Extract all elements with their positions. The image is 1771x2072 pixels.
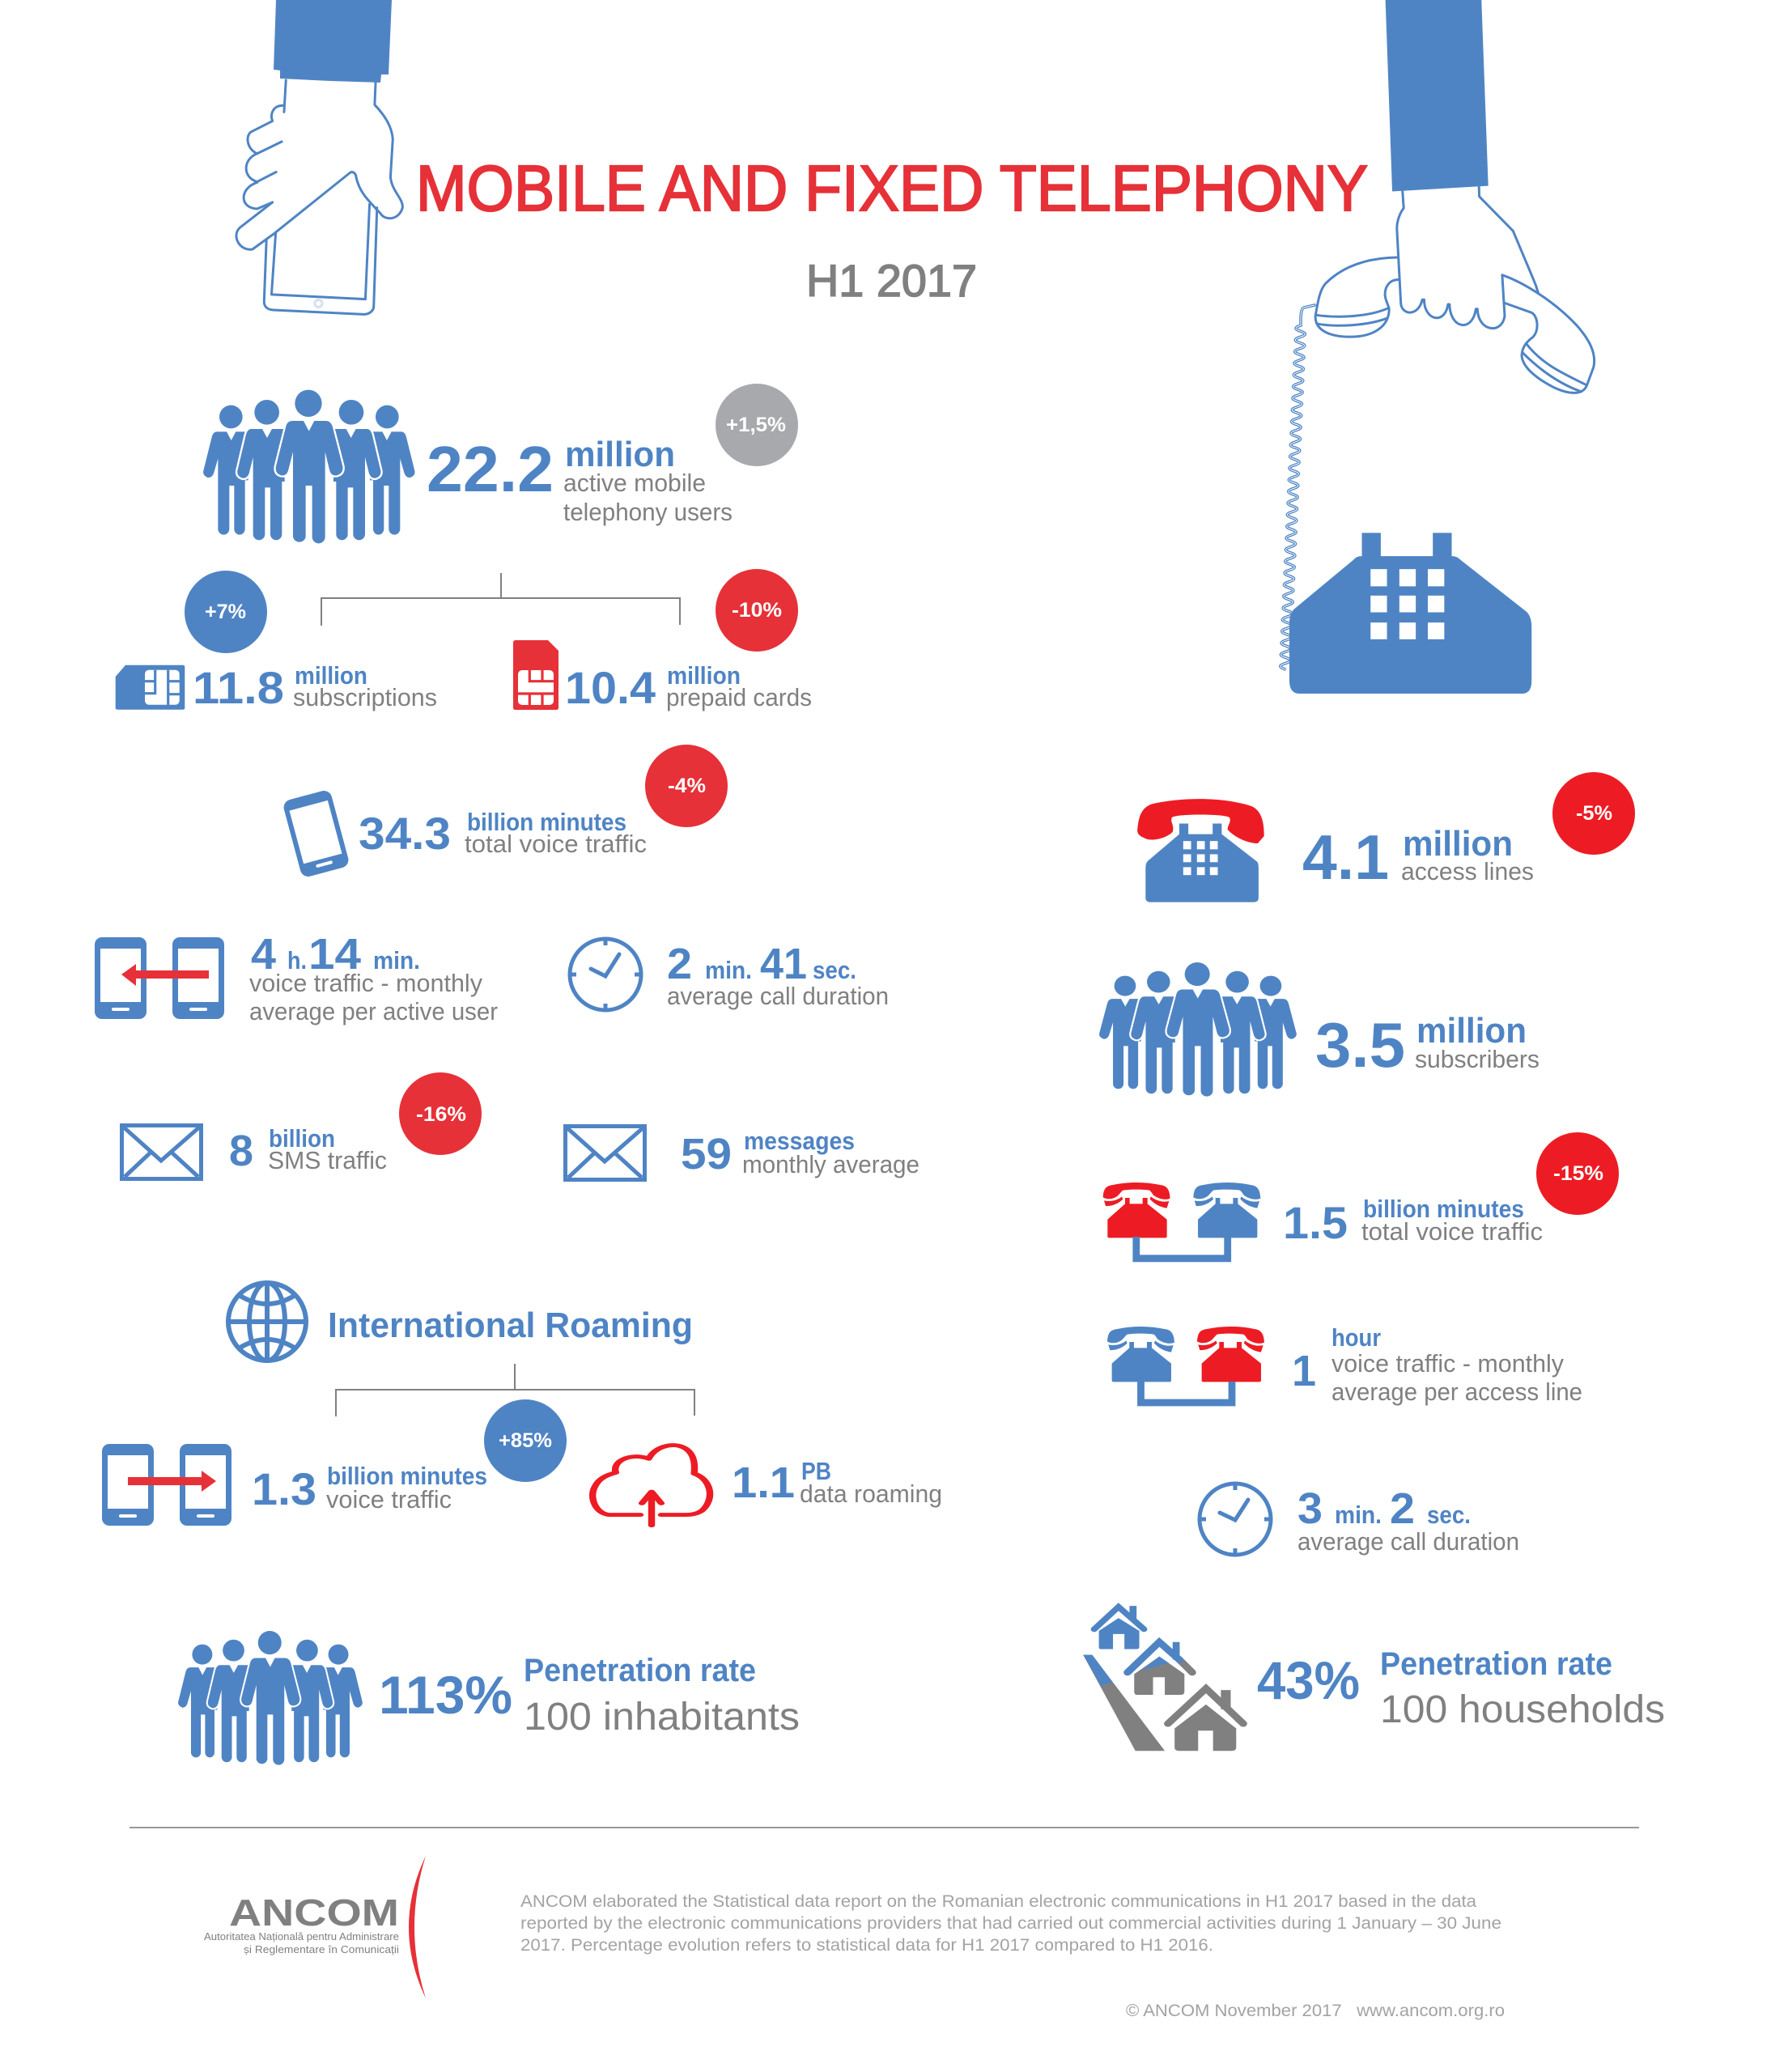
value: 113% <box>379 1665 512 1725</box>
description <box>563 469 733 526</box>
icon: two phones with right arrow <box>102 1444 231 1526</box>
stat: 1.1 PB data roaming <box>592 1446 942 1526</box>
agency name: Autoritatea Națională pentru Administrare <box>204 1930 399 1942</box>
icon: envelope <box>121 1125 201 1178</box>
value: 2 <box>667 940 692 988</box>
stat: 22.2 million active mobile users <box>203 390 733 543</box>
icon: cloud upload <box>592 1446 710 1526</box>
description: voice traffic - monthly <box>1331 1349 1564 1378</box>
stat: 8 billion SMS traffic <box>121 1124 387 1178</box>
badge: -4% <box>645 745 728 827</box>
badge: +7% <box>185 571 267 653</box>
description: access lines <box>1401 857 1534 885</box>
footer note: reported by the electronic communications providers that had carried out commercial activities during 1 January – 30 June <box>520 1914 1501 1933</box>
desk telephone body <box>1289 533 1531 694</box>
sleeve, hand and handset <box>1289 0 1595 694</box>
unit: million <box>1416 1011 1527 1051</box>
icon: telephone with red handset <box>1137 799 1264 902</box>
value: sec. <box>813 956 856 984</box>
agency name: și Reglementare în Comunicații <box>244 1943 399 1955</box>
icon: clock <box>1200 1484 1271 1555</box>
value: 8 <box>229 1127 253 1175</box>
description: average per active user <box>249 997 498 1025</box>
value: 22.2 <box>427 433 554 505</box>
coiled cord <box>1280 305 1314 675</box>
value: min. <box>705 956 752 984</box>
value: 14 <box>308 930 361 979</box>
icon: SIM card red <box>513 640 558 710</box>
value: 1.3 <box>252 1463 316 1514</box>
description: 100 inhabitants <box>524 1696 800 1739</box>
stat: 4 h 14 min per active user <box>95 930 498 1025</box>
label: Penetration rate <box>524 1653 756 1688</box>
icon: houses and road <box>1083 1606 1243 1751</box>
description: average call duration <box>1297 1527 1519 1556</box>
stat: 3.5 million subscribers <box>1099 962 1540 1097</box>
illustration: hand holding handset above desk telephone <box>1280 0 1595 694</box>
description: SMS traffic <box>268 1146 387 1174</box>
value: 41 <box>760 940 807 988</box>
label: Penetration rate <box>1380 1646 1612 1682</box>
stat: 43% penetration rate households <box>1083 1606 1665 1751</box>
stat: 11.8 million subscriptions <box>116 661 437 713</box>
badge: +1,5% <box>716 384 798 466</box>
icon: clock <box>570 939 641 1010</box>
red arc <box>409 1856 426 1998</box>
unit: million <box>667 661 741 690</box>
value: 2 <box>1390 1484 1415 1533</box>
unit: billion minutes <box>327 1462 487 1490</box>
unit: messages <box>744 1127 855 1155</box>
badge: -15%: -15% <box>1553 1162 1603 1185</box>
description <box>1331 1349 1582 1406</box>
value: min. <box>1335 1501 1382 1529</box>
logo: ANCOM <box>204 1856 426 1998</box>
hand and phone outline <box>236 80 402 314</box>
unit: hour <box>1331 1323 1381 1352</box>
value <box>667 940 856 988</box>
badge: +85%: +85% <box>499 1429 552 1452</box>
description: monthly average <box>742 1150 919 1178</box>
sleeve <box>274 0 392 83</box>
icon: people group <box>178 1631 363 1765</box>
description: 100 households <box>1380 1688 1665 1731</box>
value: 10.4 <box>565 662 656 713</box>
stat: 34.3 billion minutes total voice traffic <box>282 789 647 878</box>
stat: 3 min 2 sec average call duration <box>1200 1484 1519 1556</box>
icon: globe <box>228 1283 306 1361</box>
value: 11.8 <box>193 662 284 713</box>
icon: people group <box>203 390 415 543</box>
description: average per access line <box>1331 1378 1582 1406</box>
value: 3.5 <box>1315 1009 1405 1081</box>
footer note: 2017. Percentage evolution refers to statistical data for H1 2017 compared to H1 2016. <box>520 1936 1213 1955</box>
stat: 1 hour per access line <box>1107 1323 1582 1406</box>
unit: million <box>565 435 675 474</box>
description: subscribers <box>1415 1045 1540 1073</box>
value: 4 <box>251 930 276 979</box>
agency name <box>204 1930 399 1955</box>
description: voice traffic - monthly <box>249 969 482 997</box>
stat: 113% penetration rate <box>178 1631 800 1765</box>
heading: International Roaming <box>328 1306 693 1345</box>
description: subscriptions <box>293 683 437 711</box>
stat: 10.4 million prepaid cards <box>513 640 812 713</box>
value: 1.1 <box>732 1458 795 1507</box>
value: h. <box>287 946 307 974</box>
badge: -16%: -16% <box>416 1103 466 1126</box>
footer note <box>520 1892 1501 1955</box>
badge: -4%: -4% <box>668 775 706 797</box>
unit: million <box>295 661 367 690</box>
description: voice traffic <box>326 1485 452 1514</box>
badge: +7%: +7% <box>205 601 246 623</box>
badge: -10% <box>716 569 798 652</box>
badge: -5% <box>1552 772 1635 855</box>
subtitle: H1 2017 <box>806 255 977 306</box>
value: 1.5 <box>1283 1197 1348 1248</box>
illustration: hand holding smartphone <box>236 0 402 314</box>
value <box>251 930 420 979</box>
description: active mobile <box>563 469 706 497</box>
value: sec. <box>1427 1501 1471 1529</box>
stat: 1.3 billion minutes roaming voice traffic <box>102 1444 487 1526</box>
stat: 2 min 41 sec average call duration <box>570 939 889 1010</box>
value: 1 <box>1292 1347 1316 1395</box>
unit: million <box>1403 824 1513 864</box>
icon: envelope <box>565 1127 644 1180</box>
wordmark: ANCOM <box>229 1892 399 1934</box>
stat: 4.1 million access lines <box>1137 799 1534 902</box>
description: total voice traffic <box>465 830 647 858</box>
description: total voice traffic <box>1361 1217 1543 1246</box>
description <box>249 969 498 1025</box>
icon: tilted smartphone <box>282 789 350 878</box>
unit: billion minutes <box>467 808 626 836</box>
unit: billion <box>269 1124 335 1153</box>
badge: -16% <box>399 1072 482 1155</box>
description: prepaid cards <box>666 683 812 711</box>
unit: billion minutes <box>1363 1195 1524 1223</box>
description: telephony users <box>563 498 733 526</box>
value: 4.1 <box>1302 822 1389 893</box>
section: international roaming heading <box>228 1283 693 1361</box>
badge: -15% <box>1536 1132 1619 1215</box>
value: min. <box>373 946 420 974</box>
value: 59 <box>681 1130 732 1178</box>
unit: PB <box>801 1457 831 1485</box>
copyright: © ANCOM November 2017 www.ancom.org.ro <box>1126 2002 1505 2020</box>
value: 34.3 <box>359 808 451 859</box>
stat: 59 messages monthly average <box>565 1127 919 1180</box>
badge: +1,5%: +1,5% <box>726 414 786 436</box>
value <box>1297 1484 1471 1533</box>
value: 43% <box>1257 1650 1360 1710</box>
description: average call duration <box>667 982 889 1010</box>
stat: 1.5 billion minutes total voice traffic <box>1103 1182 1543 1259</box>
icon: SIM card blue <box>116 665 185 710</box>
icon: people group <box>1099 962 1297 1097</box>
badge: +85% <box>484 1399 567 1482</box>
value: 3 <box>1297 1484 1323 1533</box>
footer note: ANCOM elaborated the Statistical data report on the Romanian electronic communications in H1 2017 based in the data <box>520 1892 1476 1911</box>
description: data roaming <box>800 1480 942 1508</box>
badge: -10%: -10% <box>732 599 782 622</box>
icon: red and blue connected telephones <box>1103 1182 1260 1259</box>
icon: two phones with left arrow <box>95 937 224 1019</box>
icon: blue and red connected telephones <box>1107 1327 1264 1403</box>
keypad <box>1370 569 1444 639</box>
title: MOBILE AND FIXED TELEPHONY <box>416 152 1368 224</box>
badge: -5%: -5% <box>1576 802 1612 825</box>
